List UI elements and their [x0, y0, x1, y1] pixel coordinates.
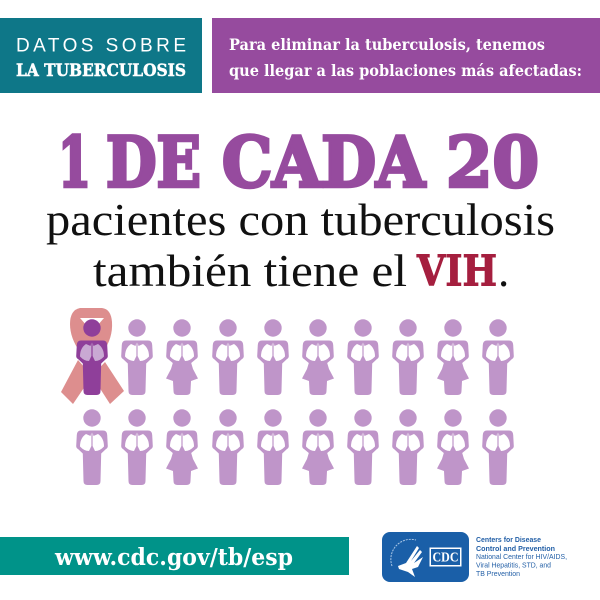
CDC wordmark: CDC	[432, 550, 458, 566]
text block: CDC agency: Centers for Disease	[476, 535, 541, 544]
HHS seal ring	[391, 539, 416, 566]
headline statistic	[58, 122, 539, 204]
icon: awareness ribbon with highlighted person	[61, 308, 124, 404]
ribbon tails	[61, 360, 124, 404]
subtitle line 2: también tiene el	[93, 246, 407, 296]
text block: CDC agency	[476, 535, 567, 578]
icon: CDC logo	[382, 532, 469, 582]
ribbon opening	[80, 318, 104, 326]
HHS eagle	[398, 546, 423, 577]
period: .	[498, 246, 509, 296]
panel: intro statement	[212, 18, 600, 93]
headline statistic: 1	[58, 122, 91, 204]
text block: CDC agency: TB Prevention	[476, 569, 520, 578]
headline statistic: DE	[106, 122, 201, 204]
person with lungs	[76, 319, 108, 395]
subtitle line 1: pacientes con tuberculosis	[46, 195, 555, 245]
website url: www.cdc.gov/tb/esp	[54, 544, 293, 571]
highlighted word: VIH: VIH	[416, 246, 497, 296]
panel: website url bar	[0, 537, 349, 575]
icon group: person row 2	[76, 409, 514, 485]
ribbon loop	[70, 308, 112, 352]
icon group: person row 1	[121, 319, 514, 395]
panel: fact sheet label	[0, 18, 202, 93]
CDC box	[430, 548, 462, 566]
text block: CDC agency: Viral Hepatitis, STD, and	[476, 560, 551, 570]
headline statistic: CADA	[222, 122, 426, 204]
label: datos sobre: DATOS SOBRE	[16, 36, 186, 56]
text block: CDC agency: Control and Prevention	[476, 544, 555, 553]
label: la tuberculosis: LA TUBERCULOSIS	[16, 61, 186, 81]
intro line 1: Para eliminar la tuberculosis, tenemos	[229, 35, 545, 54]
headline statistic: 20	[446, 122, 539, 204]
text block: CDC agency: National Center for HIV/AIDS,	[476, 552, 567, 561]
